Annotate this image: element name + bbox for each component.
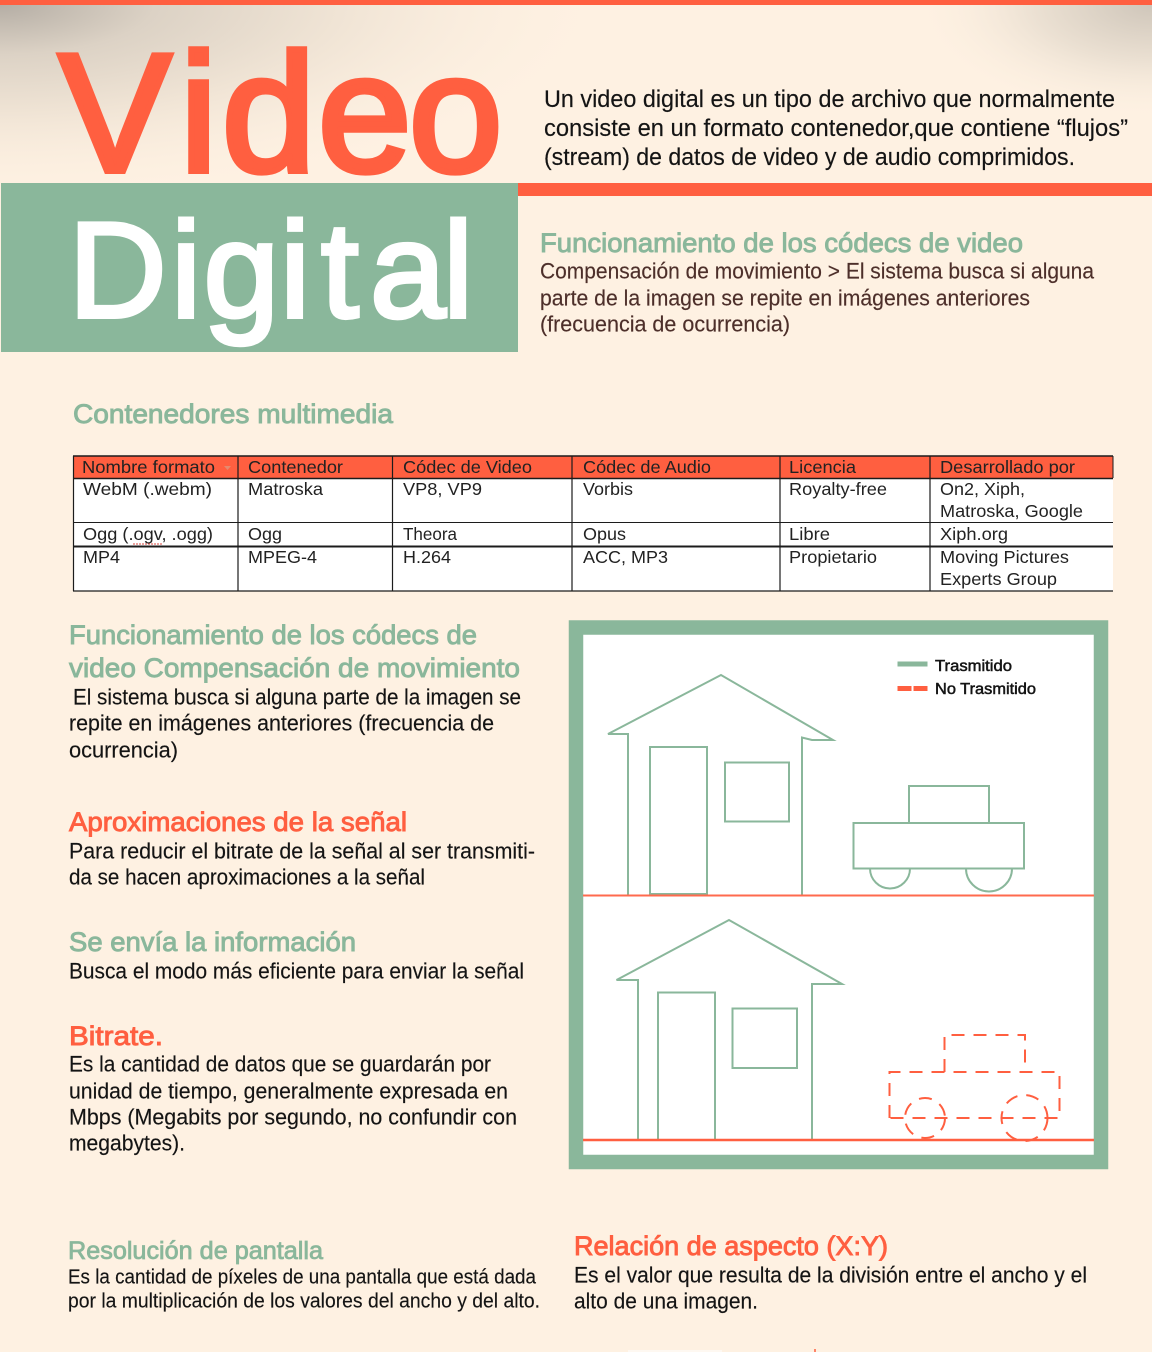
text block: introduction: Un video digital es un tipo de archivo que normalmente: [544, 86, 1115, 113]
heading: Relación de aspecto (X:Y): [574, 1231, 888, 1261]
table row: MP4: Propietario: [789, 547, 877, 567]
panel: motion compensation diagram: [576, 628, 1101, 1162]
table row: WebM: WebM (.webm): [83, 479, 212, 499]
table row: MP4: MPEG-4: [248, 547, 317, 567]
table row: WebM: Matroska, Google: [940, 501, 1083, 521]
text block: resolucion de pantalla: [68, 1237, 540, 1312]
table row: Ogg: Xiph.org: [940, 524, 1008, 544]
table row: MP4: ACC, MP3: [583, 547, 668, 567]
body: repite en imágenes anteriores (frecuencia de: [69, 710, 494, 736]
scene 2: house: [616, 920, 842, 1140]
text block: aproximaciones de la senal: [69, 807, 535, 890]
body: Busca el modo más eficiente para enviar la señal: [69, 958, 524, 984]
table row: Ogg: Opus: [583, 524, 626, 544]
table row: MP4: MP4: [83, 547, 120, 567]
text block: funcionamiento de los codecs: [540, 228, 1095, 336]
table row: MP4: Moving Pictures: [940, 547, 1069, 567]
table row: Ogg: Libre: [789, 524, 830, 544]
heading: Aproximaciones de la señal: [69, 807, 407, 837]
text block: introduction: consiste en un formato contenedor,que contiene “flujos”: [544, 115, 1128, 142]
text block: introduction: [544, 86, 1128, 171]
body: Es la cantidad de datos que se guardarán por: [69, 1052, 491, 1076]
table row: WebM: On2, Xiph,: [940, 479, 1025, 499]
body: [574, 1262, 1087, 1314]
table header: Códec de Audio: [583, 457, 711, 477]
table: contenedores: [73, 456, 1113, 591]
table header: Nombre formato: [82, 457, 215, 477]
table row: WebM: Royalty-free: [789, 479, 887, 499]
body: [69, 684, 521, 762]
body: Mbps (Megabits por segundo, no confundir con: [69, 1104, 517, 1130]
heading: [69, 620, 520, 683]
table row: Ogg: Theora: [403, 524, 457, 544]
body: megabytes).: [69, 1130, 185, 1156]
table header: Códec de Video: [403, 457, 532, 477]
legend: Trasmitido: [935, 658, 1012, 675]
table row: WebM: VP8, VP9: [403, 479, 482, 499]
panel: title block: [1, 19, 1152, 352]
body: Para reducir el bitrate de la señal al ser transmiti-: [69, 838, 535, 864]
heading: Se envía la información: [69, 927, 356, 957]
text block: bitrate: [69, 1021, 517, 1156]
table header: Desarrollado por: [940, 457, 1075, 477]
body: [68, 1266, 540, 1312]
text block: compensacion de movimiento: [69, 620, 521, 762]
body: ocurrencia): [69, 738, 178, 762]
green title band: [1, 183, 518, 352]
text block: relacion de aspecto: [574, 1231, 1087, 1314]
scene 1: ground line: [583, 894, 1094, 896]
heading: Resolución de pantalla: [68, 1237, 323, 1265]
table header: [73, 456, 1113, 478]
table row: WebM: [83, 479, 1083, 521]
body: Es la cantidad de píxeles de una pantalla que está dada: [68, 1266, 537, 1288]
table row: WebM: Matroska: [248, 479, 323, 499]
table header: Contenedor: [248, 457, 343, 477]
scene 1: car: [854, 786, 1024, 892]
diagram frame: [576, 628, 1101, 1162]
scene 1: house: [608, 675, 833, 895]
scene 2: car not transmitted: [890, 1035, 1060, 1141]
table row: MP4: Experts Group: [940, 569, 1057, 589]
body: por la multiplicación de los valores del ancho y del alto.: [68, 1290, 540, 1312]
heading: Funcionamiento de los códecs de video: [540, 228, 1023, 258]
heading: Bitrate.: [69, 1021, 163, 1051]
title: Video: Video: [59, 19, 502, 207]
body: unidad de tiempo, generalmente expresada en: [69, 1078, 508, 1104]
title: Digital: Digital: [68, 194, 473, 346]
body: Es el valor que resulta de la división entre el ancho y el: [574, 1262, 1087, 1288]
table header: Licencia: [789, 457, 856, 477]
body: (frecuencia de ocurrencia): [540, 312, 790, 336]
body: da se hacen aproximaciones a la señal: [69, 864, 425, 890]
table row: MP4: H.264: [403, 547, 451, 567]
table row: Ogg: Ogg: [248, 524, 282, 544]
table row: WebM: Vorbis: [583, 479, 633, 499]
table row: Ogg: [83, 524, 1008, 544]
text block: introduction: (stream) de datos de video y de audio comprimidos.: [544, 144, 1075, 171]
heading: video Compensación de movimiento: [69, 653, 520, 683]
heading: Funcionamiento de los códecs de: [69, 620, 477, 650]
table row: Ogg: Ogg (.ogv, .ogg): [83, 524, 213, 544]
body: [540, 258, 1095, 336]
body: [69, 1052, 517, 1156]
body: parte de la imagen se repite en imágenes anteriores: [540, 286, 1030, 310]
body: El sistema busca si alguna parte de la imagen se: [73, 684, 521, 710]
body: alto de una imagen.: [574, 1288, 758, 1314]
body: Compensación de movimiento > El sistema busca si alguna: [540, 258, 1095, 284]
text block: se envia la informacion: [69, 927, 524, 984]
orange divider bar: [518, 183, 1152, 196]
heading: contenedores multimedia: Contenedores multimedia: [73, 399, 394, 429]
scene 2: ground line: [583, 1139, 1094, 1141]
legend: [898, 658, 1036, 698]
body: [69, 838, 535, 890]
legend: No Trasmitido: [935, 681, 1036, 698]
table row: MP4: [83, 547, 1069, 589]
